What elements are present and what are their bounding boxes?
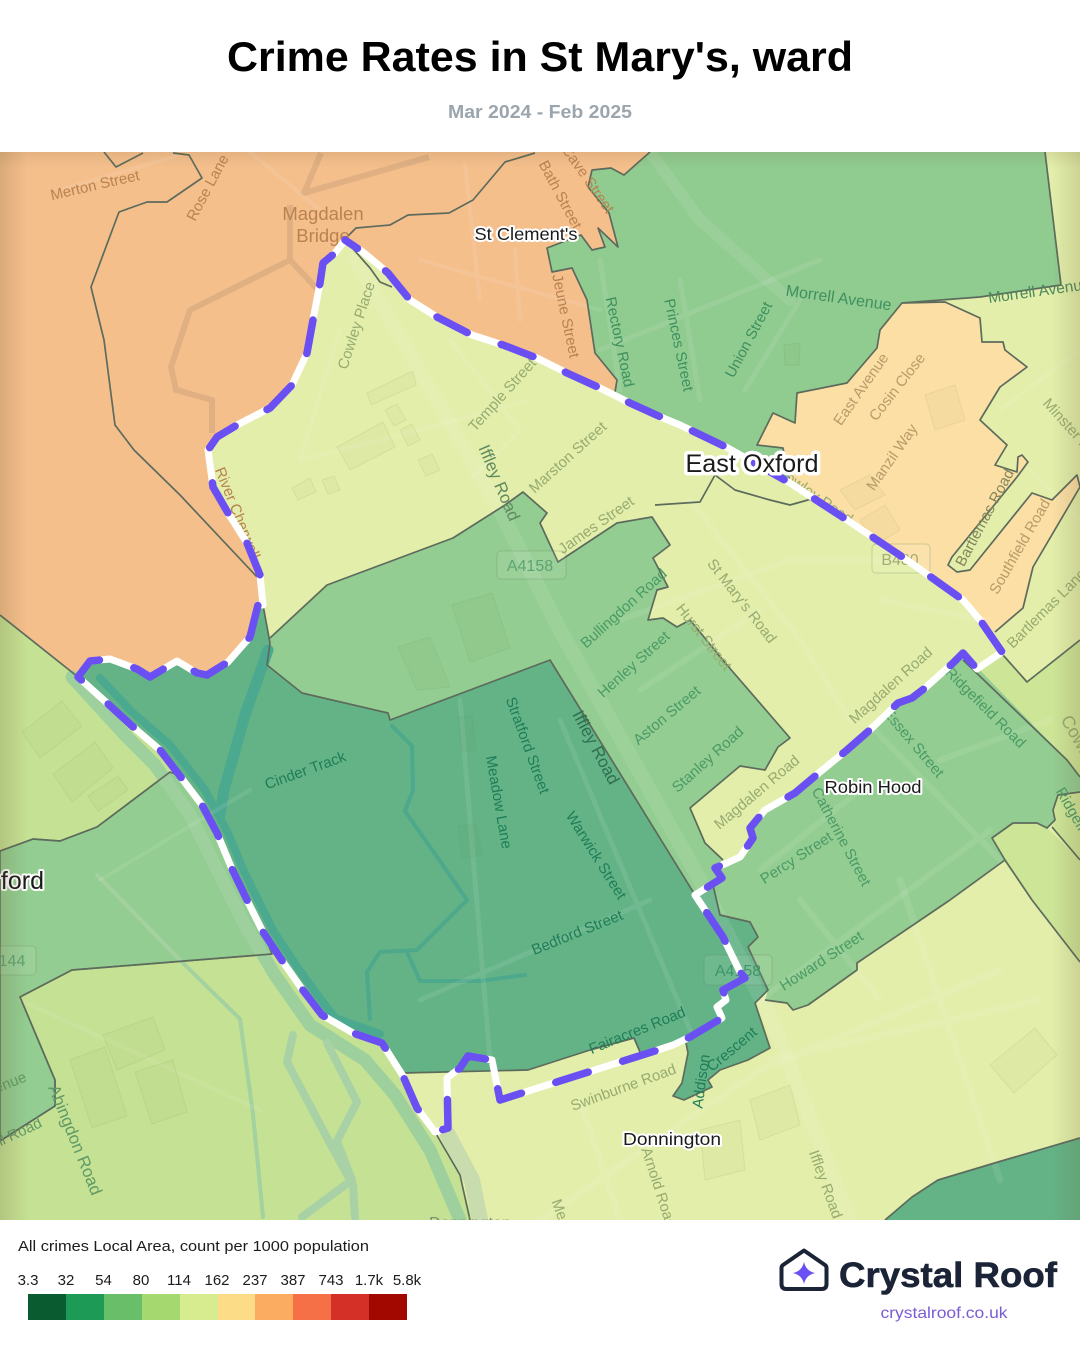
legend values: 237	[242, 1272, 268, 1289]
street labels on pale green: Meadow	[548, 1197, 583, 1256]
street labels on dark green: Cinder Track	[263, 748, 349, 793]
place label: Robin Hood: Robin Hood	[824, 777, 922, 797]
area: north central green	[547, 152, 1061, 483]
icon: house with star	[782, 1250, 826, 1289]
title: Crime Rates in St Mary's, ward	[227, 33, 853, 80]
roads: lighter street network	[20, 152, 1080, 1220]
road shield labels: B480	[881, 552, 919, 569]
street labels on pale green: James Street	[555, 493, 638, 558]
logo: Crystal Roof	[782, 1250, 1057, 1322]
street labels on pale green	[335, 280, 1080, 1256]
ward boundary: purple dashes	[78, 240, 1002, 1132]
street labels on dark green: Iffley Road	[568, 707, 623, 788]
legend values: 54	[95, 1272, 112, 1289]
road shields	[0, 544, 930, 985]
street labels on pale green: Iffley Road	[474, 442, 524, 524]
street labels on pale green: Magdalen Road	[711, 752, 803, 833]
street labels on pale green: Arnold Road	[637, 1145, 679, 1230]
street labels on dark green: Crescent	[704, 1023, 761, 1075]
place label: East Oxford: East Oxford	[686, 450, 818, 478]
buildings and sports grounds	[22, 343, 1057, 1180]
legend colour scale	[28, 1294, 407, 1320]
street labels on pale green: Marston Street	[526, 418, 611, 497]
street labels on green north	[602, 276, 1080, 394]
street labels on orange: Cave Street	[558, 142, 618, 217]
street labels on mid green: Bullingdon Road	[577, 566, 671, 652]
legend values: 1.7k	[355, 1272, 384, 1289]
river: teal channels	[72, 650, 525, 1220]
street labels on pale orange: Bartlemas Road	[952, 466, 1018, 569]
street labels on orange: River Cherwell	[211, 465, 263, 562]
street labels on orange: Rose Lane	[183, 152, 233, 224]
street labels on pale green: Iffley Road	[805, 1148, 845, 1221]
street labels on pale green: Cowley Place	[335, 280, 379, 371]
map edge shading	[0, 152, 1080, 1220]
ward boundary: white casing	[78, 240, 1002, 1132]
street labels on dark green: Stratford Street	[502, 695, 553, 797]
area: south-west light green	[0, 615, 472, 1220]
street labels on dark green: Addison	[689, 1053, 714, 1109]
legend values: 114	[167, 1272, 191, 1289]
street labels on dark green	[263, 695, 761, 1109]
street labels on pale green: Hurst Street	[672, 600, 735, 675]
street labels on pale orange: East Avenue	[830, 350, 892, 429]
road shield labels: A4158	[715, 963, 761, 980]
legend values	[18, 1272, 422, 1289]
street labels on mid green: Howard Street	[777, 928, 867, 994]
street labels on green north: Union Street	[722, 298, 776, 381]
street labels on mid green: Henley Street	[595, 627, 674, 701]
street labels on green north: Princes Street	[660, 297, 697, 394]
legend values: 5.8k	[393, 1272, 422, 1289]
street labels on mid green: Ridgefield Road	[941, 664, 1029, 752]
place label: St Clement's: St Clement's	[474, 224, 578, 244]
legend values: 32	[58, 1272, 74, 1289]
legend values: 162	[204, 1272, 230, 1289]
street labels on pale orange: Cosin Close	[866, 350, 929, 424]
rivers in orange area	[171, 153, 429, 433]
area: Addison Crescent dark green	[673, 885, 770, 1100]
boundary lines of areas	[0, 152, 1080, 1220]
place label: Donnington: Donnington	[623, 1129, 721, 1149]
wordmark: Crystal Roof	[839, 1256, 1057, 1295]
street labels on pale green: Magdalen Road	[846, 644, 936, 727]
area: East Oxford pale orange	[757, 302, 1080, 632]
area: south-east dark green	[885, 1138, 1080, 1220]
street labels on mid green: Essex Street	[880, 705, 948, 782]
street labels on mid green: Aston Street	[630, 682, 705, 749]
area: ward centre mid green	[267, 492, 790, 895]
street labels on mid green	[577, 566, 1080, 994]
street labels on orange: Bath Street	[535, 158, 585, 233]
area: west mid green	[0, 772, 272, 1141]
street labels on pale green: Swinburne Road	[568, 1061, 678, 1115]
subtitle: date range: Mar 2024 - Feb 2025	[448, 102, 632, 122]
website link: crystalroof.co.uk	[880, 1305, 1009, 1322]
street labels on pale orange: Manzil Way	[863, 421, 922, 494]
legend	[18, 1239, 422, 1320]
legend values: 387	[280, 1272, 306, 1289]
street labels on pale green: Temple Street	[465, 354, 540, 435]
street labels on orange: Jeune Street	[548, 273, 583, 360]
street labels on mid green: Catherine Street	[808, 785, 875, 890]
street labels on orange	[49, 142, 618, 562]
street labels on pale green: Cowley Road	[773, 463, 856, 528]
street labels on dark green: Bedford Street	[529, 907, 626, 959]
street labels on orange: Merton Street	[49, 167, 142, 204]
place label: Oxford (cut off by map edge): ford	[1, 867, 44, 895]
street labels on pale green: St Mary's Road	[703, 556, 780, 647]
map base: pale green areas	[212, 152, 1080, 1220]
area: ward south-west dark green	[78, 605, 745, 1073]
street labels on dark green: Meadow Lane	[482, 754, 515, 850]
area: east light green strips	[977, 640, 1080, 962]
street labels on pale green: Donnington	[429, 1215, 511, 1232]
street labels south-west	[0, 1069, 106, 1198]
street labels on dark green: Fairacres Road	[587, 1004, 688, 1058]
street labels on pale orange: Southfield Road	[986, 496, 1054, 597]
legend values: 3.3	[18, 1272, 38, 1289]
road shield labels: A4158	[507, 558, 553, 575]
street labels on pale orange	[830, 350, 1054, 597]
legend values: 743	[318, 1272, 344, 1289]
street labels south-west: Abingdon Road	[44, 1082, 106, 1198]
road shield labels	[0, 552, 919, 980]
area: Robin Hood mid green	[713, 653, 1080, 1010]
street labels on green north: Morrell Avenue	[785, 283, 893, 314]
street labels on dark green: Warwick Street	[562, 809, 630, 903]
street labels on mid green: Percy Street	[757, 828, 836, 888]
area: north-west orange	[0, 152, 650, 677]
street labels on orange: Magdalen	[282, 203, 364, 224]
street labels on green north: Rectory Road	[602, 295, 637, 389]
legend title: All crimes Local Area, count per 1000 population	[18, 1239, 369, 1255]
street labels on orange: Bridge	[296, 225, 350, 246]
street labels on mid green: Stanley Road	[669, 723, 747, 796]
legend values: 80	[133, 1272, 149, 1289]
